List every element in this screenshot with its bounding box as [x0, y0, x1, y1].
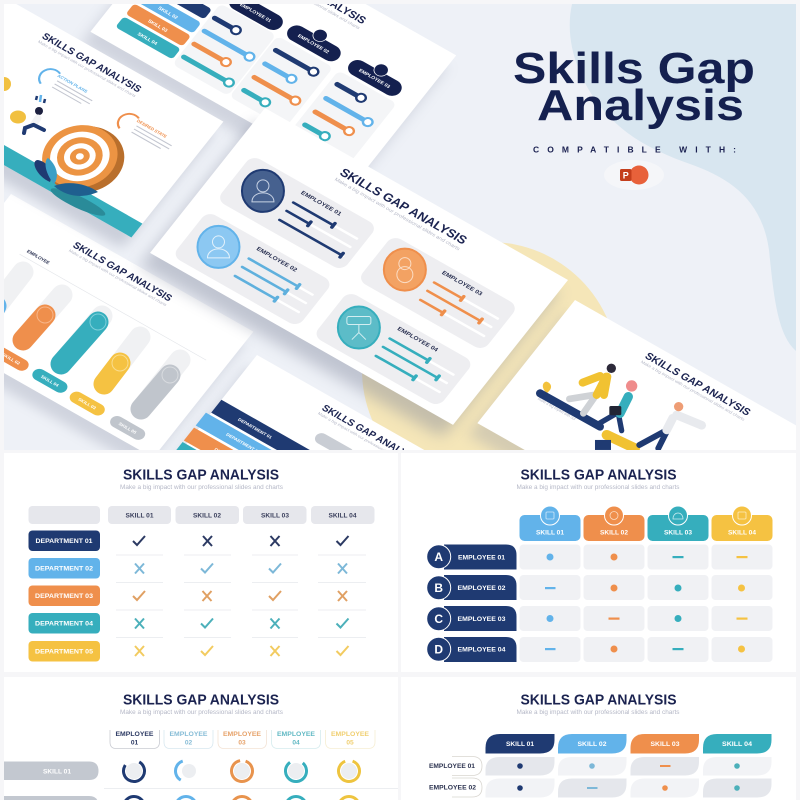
slide title: SKILLS GAP ANALYSIS — [39, 32, 143, 95]
powerpoint badge: P — [623, 170, 629, 180]
subheading: Make a big impact with our professional slides and charts — [516, 710, 680, 716]
yellow circle — [362, 242, 607, 450]
employee tabs: EMPLOYEE — [116, 731, 154, 738]
skill 02 pill — [4, 796, 98, 800]
skill 04 header: SKILL 04 — [722, 741, 752, 748]
heading: SKILLS GAP ANALYSIS — [520, 466, 676, 484]
employee 02 label: EMPLOYEE 02 — [429, 785, 476, 792]
person two head — [626, 380, 637, 392]
skill 04 header: SKILL 04 — [728, 530, 756, 536]
person two torso — [620, 397, 628, 413]
subheading: Make a big impact with our professional slides and charts — [120, 710, 283, 716]
row 2 marks — [517, 785, 740, 791]
slide: top employees — [81, 0, 456, 195]
employee tabs: EMPLOYEE — [223, 731, 262, 738]
bar: skill 02 — [23, 295, 62, 340]
name: EMPLOYEE 01 — [299, 190, 343, 218]
slide: lower middle departments — [176, 355, 424, 450]
skill 01 header — [486, 734, 554, 754]
current state text: Make a big impact with our — [537, 396, 578, 421]
label: skill 02 — [4, 348, 29, 371]
slide subtitle: Make a big impact with our professional slides and charts — [317, 411, 417, 470]
navy step — [540, 393, 600, 427]
current state label: CURRENT STATE — [540, 392, 574, 413]
illustration: three people walking on steps — [540, 364, 702, 450]
plant — [543, 382, 551, 393]
skill 03 header — [630, 734, 699, 754]
bars — [374, 337, 455, 394]
name: EMPLOYEE 03 — [440, 270, 484, 298]
employee 04 row label: D — [434, 642, 443, 656]
slide subtitle: Make a big impact with our professional slides and charts — [68, 248, 168, 307]
slide: lower left bar chart — [0, 194, 253, 469]
yellow shape at edge — [0, 77, 11, 91]
skill 01 header: SKILL 01 — [506, 741, 534, 748]
header row: SKILL 03 — [261, 512, 289, 520]
bar: skill 05 — [141, 360, 180, 409]
card: employee 03 — [357, 231, 521, 351]
ring chart row 2 — [124, 796, 360, 800]
label: skill 04 — [32, 368, 68, 393]
desired state text — [131, 125, 172, 152]
person two bag — [609, 406, 621, 415]
heading: SKILLS GAP ANALYSIS — [520, 692, 676, 708]
skill 02 header — [558, 734, 626, 754]
slide subtitle: Make a big impact with our professional slides and charts — [640, 359, 746, 422]
leaves — [34, 158, 98, 196]
card: employee 04 — [313, 289, 475, 407]
employee 03 row label: EMPLOYEE 03 — [458, 616, 506, 623]
label: skill 03: SKILL 03 — [77, 397, 98, 411]
skill 03 header — [648, 506, 708, 541]
department 02: DEPARTMENT 02 — [225, 432, 262, 455]
person three head — [674, 402, 683, 411]
employee 04 row label: EMPLOYEE 04 — [458, 646, 506, 654]
skill pills — [115, 0, 212, 59]
department labels: DEPARTMENT 03 — [35, 593, 93, 600]
mini bars icon — [36, 95, 45, 103]
header row: SKILL 01 — [126, 512, 154, 520]
main title — [513, 44, 755, 130]
slide title: SKILLS GAP ANALYSIS — [642, 351, 753, 418]
card: employee 01 — [216, 153, 379, 271]
avatar — [384, 249, 426, 291]
header row — [28, 506, 374, 524]
department labels: DEPARTMENT 04 — [35, 620, 93, 628]
employee 04 row label — [427, 637, 516, 662]
skill pills: SKILL 03 — [146, 19, 169, 34]
person three torso — [667, 415, 702, 430]
department 01: DEPARTMENT 01 — [237, 417, 273, 440]
slide subtitle: Make a big impact with our professional slides and charts — [37, 39, 137, 98]
department labels — [28, 530, 100, 662]
hero panel — [4, 4, 796, 450]
bars — [278, 201, 358, 258]
slide: target illustration — [0, 0, 223, 249]
slide: central employee cards — [140, 108, 568, 438]
employee column 3 — [290, 48, 414, 164]
department labels: DEPARTMENT 05 — [35, 648, 93, 656]
main title: Analysis — [537, 81, 744, 130]
name: EMPLOYEE 02 — [255, 246, 298, 274]
label: skill 03 — [70, 392, 105, 416]
desired state label: DESIRED STATE — [136, 118, 168, 139]
employee column 1: EMPLOYEE 01 — [238, 2, 272, 24]
bar: skill 04 — [61, 314, 106, 364]
panel: leaf header matrix — [401, 677, 796, 800]
employee tabs: EMPLOYEE — [170, 731, 208, 738]
employee 03 row label: C — [434, 612, 443, 626]
department labels: DEPARTMENT 02 — [35, 566, 93, 572]
employee 03 row label — [427, 606, 516, 631]
heading: SKILLS GAP ANALYSIS — [123, 692, 279, 708]
employee 01 label: EMPLOYEE 01 — [429, 763, 475, 770]
ring chart row 1 — [120, 756, 362, 786]
employee tabs: 03 — [238, 740, 246, 746]
employee tabs: 04 — [292, 740, 300, 746]
skill 01 pill: SKILL 01 — [43, 768, 71, 776]
target — [36, 117, 131, 201]
powerpoint badge — [604, 160, 664, 190]
slide subtitle: Make a big impact with our professional slides and charts — [333, 177, 461, 252]
department 02 — [196, 412, 272, 450]
subheading: Make a big impact with our professional slides and charts — [120, 485, 283, 491]
slide: lower right team illustration — [468, 300, 796, 450]
avatar — [242, 170, 284, 212]
label: skill 04: SKILL 04 — [40, 374, 60, 388]
bars — [233, 257, 314, 314]
skill 03 header: SKILL 03 — [650, 741, 680, 748]
coin — [10, 110, 26, 124]
employee 01 row label: A — [434, 550, 443, 564]
subheading: Make a big impact with our professional slides and charts — [516, 485, 680, 491]
skill 04 header — [712, 506, 772, 541]
label: skill 02: SKILL 02 — [1, 352, 21, 366]
skill 02 header: SKILL 02 — [600, 530, 628, 536]
employee 01 label — [429, 756, 482, 776]
label: skill 05 — [110, 416, 146, 440]
bar: skill 03 — [104, 337, 140, 384]
employee tabs: 01 — [131, 740, 138, 746]
skill 03 header: SKILL 03 — [664, 530, 692, 536]
avatar — [338, 307, 380, 349]
person one head — [607, 364, 616, 373]
employee column 3: EMPLOYEE 03 — [357, 68, 391, 90]
employee 02 label — [429, 778, 482, 797]
row 1 cells — [486, 757, 772, 776]
compatible with: COMPATIBLE WITH: — [533, 144, 736, 154]
department 01 — [211, 400, 310, 450]
grey cells — [520, 544, 772, 662]
header row: SKILL 02 — [193, 512, 221, 520]
dark teal ground shadow — [48, 184, 108, 220]
employee tabs: EMPLOYEE — [277, 731, 316, 738]
avatar — [197, 226, 239, 268]
employee tabs: 02 — [185, 740, 192, 746]
employee 02 row label: B — [434, 581, 443, 595]
row 1 marks — [517, 763, 740, 769]
skill 04 header — [703, 734, 772, 754]
card: employee 02 — [172, 209, 335, 327]
desired state arc — [114, 110, 139, 133]
slide title: SKILLS GAP ANALYSIS — [337, 166, 470, 247]
person three legs — [639, 432, 667, 448]
panel: departments matrix — [4, 453, 398, 672]
employee column 1 — [172, 0, 288, 96]
employee label: EMPLOYEE — [25, 249, 51, 266]
action plans label: ACTION PLANS — [56, 73, 89, 94]
employee 02 row label: EMPLOYEE 02 — [458, 585, 506, 592]
department 04 — [176, 442, 196, 450]
employee 01 row label: EMPLOYEE 01 — [458, 554, 505, 562]
action plans text — [52, 80, 93, 107]
panel: skill rings — [4, 677, 398, 800]
department 03 — [184, 428, 234, 450]
person one torso — [583, 376, 607, 395]
employee column 2 — [229, 14, 351, 128]
employee 01 row label — [427, 544, 516, 570]
teal ground band — [0, 86, 142, 237]
department labels: DEPARTMENT 01 — [36, 538, 93, 545]
panel: employees matrix — [401, 453, 796, 672]
person two legs — [598, 413, 622, 431]
skill 01 header: SKILL 01 — [536, 530, 564, 536]
heading: SKILLS GAP ANALYSIS — [123, 466, 279, 484]
navy block — [595, 440, 611, 450]
header row: SKILL 04 — [328, 512, 357, 520]
row 2 cells — [486, 778, 772, 798]
skill pills: SKILL 04 — [136, 32, 158, 47]
action plans arc — [35, 65, 61, 88]
slide title: SKILLS GAP ANALYSIS — [70, 241, 174, 304]
employee column 2: EMPLOYEE 02 — [296, 33, 330, 55]
person on target — [24, 107, 44, 133]
employee 02 row label — [427, 575, 516, 600]
employee tabs: 05 — [346, 740, 354, 746]
slide title: SKILLS GAP ANALYSIS — [319, 403, 423, 467]
dots and dashes — [545, 554, 748, 652]
bar: skill 01 — [0, 272, 23, 316]
main title: Skills Gap — [513, 44, 755, 93]
grey header pill — [315, 433, 352, 450]
label: skill 05: SKILL 05 — [117, 421, 138, 435]
skill 01 pill — [4, 762, 98, 780]
department 03: DEPARTMENT 03 — [213, 447, 250, 470]
skill 01 header — [520, 506, 580, 541]
yellow step — [607, 435, 635, 448]
skill 02 header — [584, 506, 644, 541]
check and cross marks — [133, 536, 348, 656]
pale blue blob — [570, 4, 796, 351]
person one legs — [569, 395, 595, 413]
name: EMPLOYEE 04 — [396, 326, 439, 354]
skill pills: SKILL 02 — [157, 6, 179, 21]
employee tabs: EMPLOYEE — [331, 731, 370, 738]
skill 02 header: SKILL 02 — [578, 741, 607, 748]
employee tabs — [110, 730, 375, 748]
bars — [419, 281, 499, 338]
